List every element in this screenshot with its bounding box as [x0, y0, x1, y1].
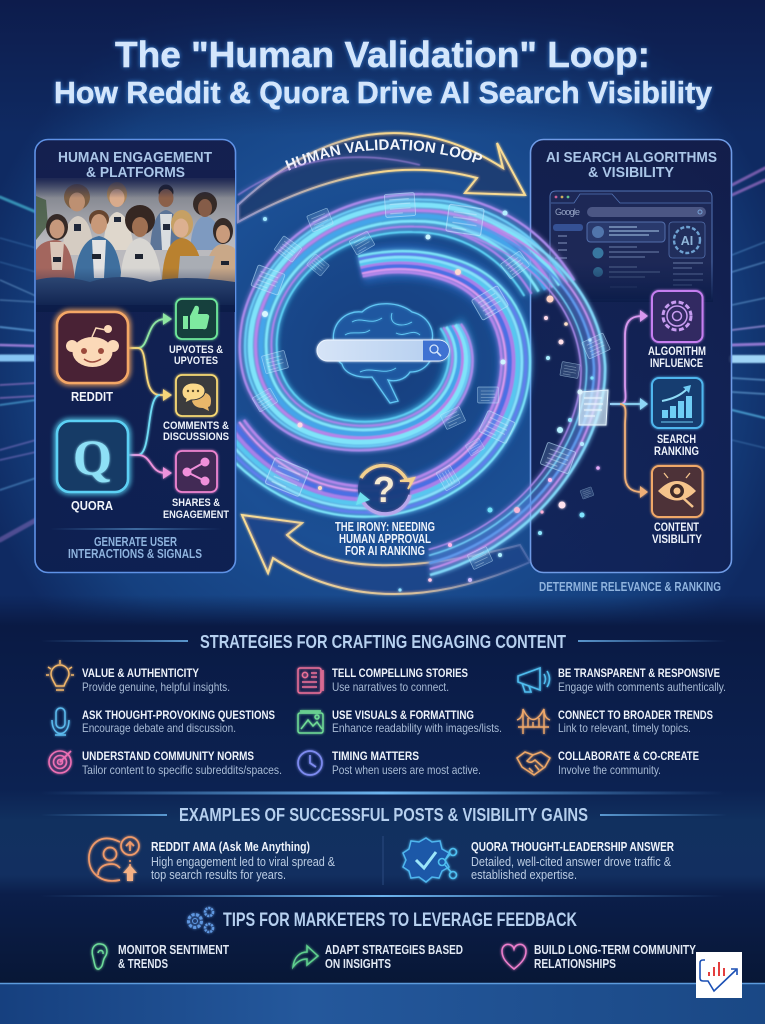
item: collaborate	[517, 749, 699, 777]
icon: irony question mark: ?	[373, 469, 395, 510]
label: comments: COMMENTS &	[163, 420, 229, 432]
spiral bands	[211, 157, 605, 575]
icon: gear	[663, 302, 691, 330]
tile: content visibility	[652, 466, 702, 517]
text: thought provoking questions	[82, 708, 275, 735]
icon: story document	[298, 668, 323, 693]
tile: shares	[176, 451, 217, 492]
label: quora: QUORA	[71, 498, 114, 513]
caption: determine relevance: DETERMINE RELEVANCE & RANKING	[539, 580, 721, 594]
label: comments: DISCUSSIONS	[163, 431, 229, 443]
text: monitor sentiment: & TRENDS	[118, 957, 168, 971]
text: reddit ama	[151, 840, 335, 882]
icon: bridge	[517, 709, 550, 734]
text: community norms: Tailor content to specific subreddits/spaces.	[82, 763, 282, 777]
heading: examples: EXAMPLES OF SUCCESSFUL POSTS & VISIBILITY GAINS	[179, 805, 588, 825]
section: examples	[41, 805, 727, 885]
heading: human engagement	[58, 149, 212, 181]
swirl glow	[228, 216, 594, 563]
icon: light bulb	[46, 660, 74, 690]
connectors: document to outcomes	[610, 310, 648, 498]
callout: irony text	[335, 520, 435, 558]
text: visuals and formatting: USE VISUALS & FORMATTING	[332, 708, 474, 722]
text: collaborate	[558, 749, 699, 777]
item: compelling stories	[298, 666, 468, 694]
item: thought provoking questions	[52, 708, 275, 735]
tile: comments	[176, 375, 217, 416]
ai gear box	[669, 222, 705, 258]
item: value and authenticity	[46, 660, 230, 694]
text: value and authenticity	[82, 666, 230, 694]
text: quora answer: established expertise.	[471, 867, 577, 882]
label: shares: ENGAGEMENT	[163, 509, 229, 521]
text: transparent and responsive	[558, 666, 726, 694]
text: reddit ama: REDDIT AMA (Ask Me Anything)	[151, 840, 310, 854]
label: search ranking	[654, 434, 699, 458]
callout: irony text: THE IRONY: NEEDING	[335, 520, 435, 534]
text: community relationships: BUILD LONG-TERM COMMUNITY	[534, 943, 697, 957]
browser mockup: Google	[555, 207, 580, 217]
heading: human engagement: & PLATFORMS	[86, 164, 185, 181]
search bar	[317, 340, 449, 361]
heading: ai search: AI SEARCH ALGORITHMS	[546, 149, 717, 166]
sparkles	[262, 210, 600, 592]
icon: thumbs up	[183, 306, 209, 329]
light streaks: right edge	[732, 168, 765, 448]
text: collaborate: Involve the community.	[558, 763, 661, 777]
icon: brain	[333, 304, 432, 403]
connectors: reddit and quora to signals	[128, 313, 172, 479]
tile: algorithm influence	[652, 291, 702, 342]
text: adapt strategies: ADAPT STRATEGIES BASED	[325, 943, 463, 957]
icon: share arrow	[293, 946, 318, 967]
icon: eye	[658, 473, 696, 507]
back row people	[62, 182, 224, 255]
icon: irony question mark	[356, 463, 414, 515]
text: collaborate: COLLABORATE & CO-CREATE	[558, 749, 699, 763]
panel: ai search algorithms and visibility	[530, 140, 732, 572]
icon: handshake	[517, 752, 550, 775]
panel: human engagement and platforms	[35, 140, 236, 572]
text: visuals and formatting: Enhance readability with images/lists.	[332, 721, 502, 735]
heading: strategies: STRATEGIES FOR CRAFTING ENGAGING CONTENT	[200, 632, 566, 652]
icon: clock	[298, 751, 322, 775]
text: value and authenticity: Provide genuine, helpful insights.	[82, 680, 230, 694]
text: transparent and responsive: Engage with comments authentically.	[558, 680, 726, 694]
text: quora answer: Detailed, well-cited answer drove traffic &	[471, 854, 671, 869]
section: strategies	[41, 632, 727, 777]
search result card	[587, 222, 665, 242]
brain and search bar	[317, 304, 449, 403]
front row people	[36, 205, 235, 285]
example: reddit ama	[89, 837, 335, 882]
text: thought provoking questions: Encourage debate and discussion.	[82, 721, 236, 735]
text: community norms: UNDERSTAND COMMUNITY NORMS	[82, 749, 254, 763]
icon: megaphone	[518, 668, 550, 692]
icon: target	[49, 751, 71, 773]
label: content visibility	[652, 522, 702, 546]
text: quora answer	[471, 840, 674, 882]
text: broader trends: CONNECT TO BROADER TRENDS	[558, 708, 713, 722]
text: visuals and formatting	[332, 708, 502, 735]
floating documents	[251, 192, 610, 570]
item: broader trends	[517, 708, 713, 735]
section: tips	[92, 908, 697, 971]
text: adapt strategies	[325, 943, 463, 971]
label: comments	[163, 420, 229, 443]
ai gear box: AI	[681, 234, 693, 248]
text: timing matters	[332, 749, 481, 777]
tip: monitor sentiment	[92, 943, 229, 971]
title: The "Human Validation" Loop:	[115, 34, 650, 75]
icon: heart	[502, 944, 526, 969]
swirl: loop of light and documents	[211, 157, 610, 592]
text: reddit ama: top search results for years.	[151, 867, 286, 882]
arrow: bottom return	[242, 515, 530, 594]
icon: ama person with upvote	[89, 837, 139, 881]
heading: ai search	[546, 149, 717, 181]
text: adapt strategies: ON INSIGHTS	[325, 957, 391, 971]
icon: microphone	[52, 708, 69, 735]
text: compelling stories: TELL COMPELLING STORIES	[332, 666, 468, 680]
icon: reddit snoo	[66, 325, 119, 367]
text: value and authenticity: VALUE & AUTHENTICITY	[82, 666, 199, 680]
heading: tips	[188, 908, 577, 932]
text: monitor sentiment	[118, 943, 229, 971]
item: community norms	[49, 749, 282, 777]
label: shares: SHARES &	[172, 497, 220, 509]
tip: community relationships	[502, 943, 697, 971]
label: upvotes: UPVOTES	[174, 355, 218, 367]
tile: upvotes	[176, 299, 217, 339]
callout: irony text: FOR AI RANKING	[345, 544, 425, 558]
phones and laptop	[53, 217, 229, 279]
label: upvotes	[169, 344, 223, 367]
photo: group of people using phones	[36, 170, 235, 312]
text: compelling stories	[332, 666, 468, 694]
heading: ai search: & VISIBILITY	[588, 164, 674, 181]
icon: chat bubbles	[182, 383, 211, 411]
example: quora answer	[403, 838, 674, 882]
arrow: human validation loop top	[236, 130, 528, 224]
label: reddit: REDDIT	[71, 389, 113, 404]
item: visuals and formatting	[298, 708, 502, 735]
text: community norms	[82, 749, 282, 777]
icon: picture	[298, 711, 323, 733]
text: transparent and responsive: BE TRANSPARENT & RESPONSIVE	[558, 666, 720, 680]
text: reddit ama: High engagement led to viral spread &	[151, 854, 335, 869]
icon: share	[184, 458, 208, 484]
right panel flow and tiles	[579, 291, 706, 546]
item: transparent and responsive	[518, 666, 726, 694]
text: broader trends: Link to relevant, timely topics.	[558, 721, 691, 735]
label: content visibility: VISIBILITY	[652, 534, 702, 546]
icon: gears	[188, 908, 213, 932]
label: algorithm influence: ALGORITHM	[648, 346, 706, 358]
tile: search ranking	[652, 378, 702, 428]
label: shares	[163, 497, 229, 521]
reddit tile	[57, 312, 128, 383]
label: search ranking: RANKING	[654, 446, 699, 458]
title	[54, 34, 713, 110]
callout: irony text: HUMAN APPROVAL	[339, 532, 431, 546]
label: upvotes: UPVOTES &	[169, 344, 223, 356]
caption: generate signals: INTERACTIONS & SIGNALS	[68, 547, 202, 561]
text: community relationships: RELATIONSHIPS	[534, 957, 616, 971]
text: monitor sentiment: MONITOR SENTIMENT	[118, 943, 229, 957]
label: content visibility: CONTENT	[654, 522, 699, 534]
label: human validation loop: HUMAN VALIDATION LOOP	[285, 139, 482, 170]
light streaks: left edge	[0, 197, 36, 540]
label: algorithm influence: INFLUENCE	[650, 358, 703, 370]
legs	[36, 277, 235, 305]
caption: generate signals	[68, 535, 202, 561]
text: quora answer: QUORA THOUGHT-LEADERSHIP ANSWER	[471, 840, 674, 854]
title: How Reddit & Quora Drive AI Search Visibility	[54, 75, 713, 110]
item: timing matters	[298, 749, 481, 777]
text: broader trends	[558, 708, 713, 735]
logo: chart badge	[696, 952, 742, 998]
label: algorithm influence	[648, 346, 706, 370]
text: timing matters: Post when users are most active.	[332, 763, 481, 777]
highlighted document	[579, 390, 608, 425]
text: compelling stories: Use narratives to connect.	[332, 680, 449, 694]
quora tile	[57, 421, 128, 492]
label: search ranking: SEARCH	[657, 434, 696, 446]
text: community relationships	[534, 943, 697, 971]
icon: verified badge with share	[403, 838, 456, 882]
heading: human engagement: HUMAN ENGAGEMENT	[58, 149, 212, 166]
tip: adapt strategies	[293, 943, 463, 971]
caption: generate signals: GENERATE USER	[94, 535, 177, 549]
heading: tips: TIPS FOR MARKETERS TO LEVERAGE FEEDBACK	[223, 910, 577, 931]
icon: quora q: Q	[73, 429, 112, 485]
text: thought provoking questions: ASK THOUGHT-PROVOKING QUESTIONS	[82, 708, 275, 722]
text: timing matters: TIMING MATTERS	[332, 749, 419, 763]
icon: ear	[92, 944, 107, 969]
icon: rising bars	[661, 385, 693, 422]
browser mockup	[550, 191, 713, 302]
section background: lower panels	[0, 595, 765, 1024]
